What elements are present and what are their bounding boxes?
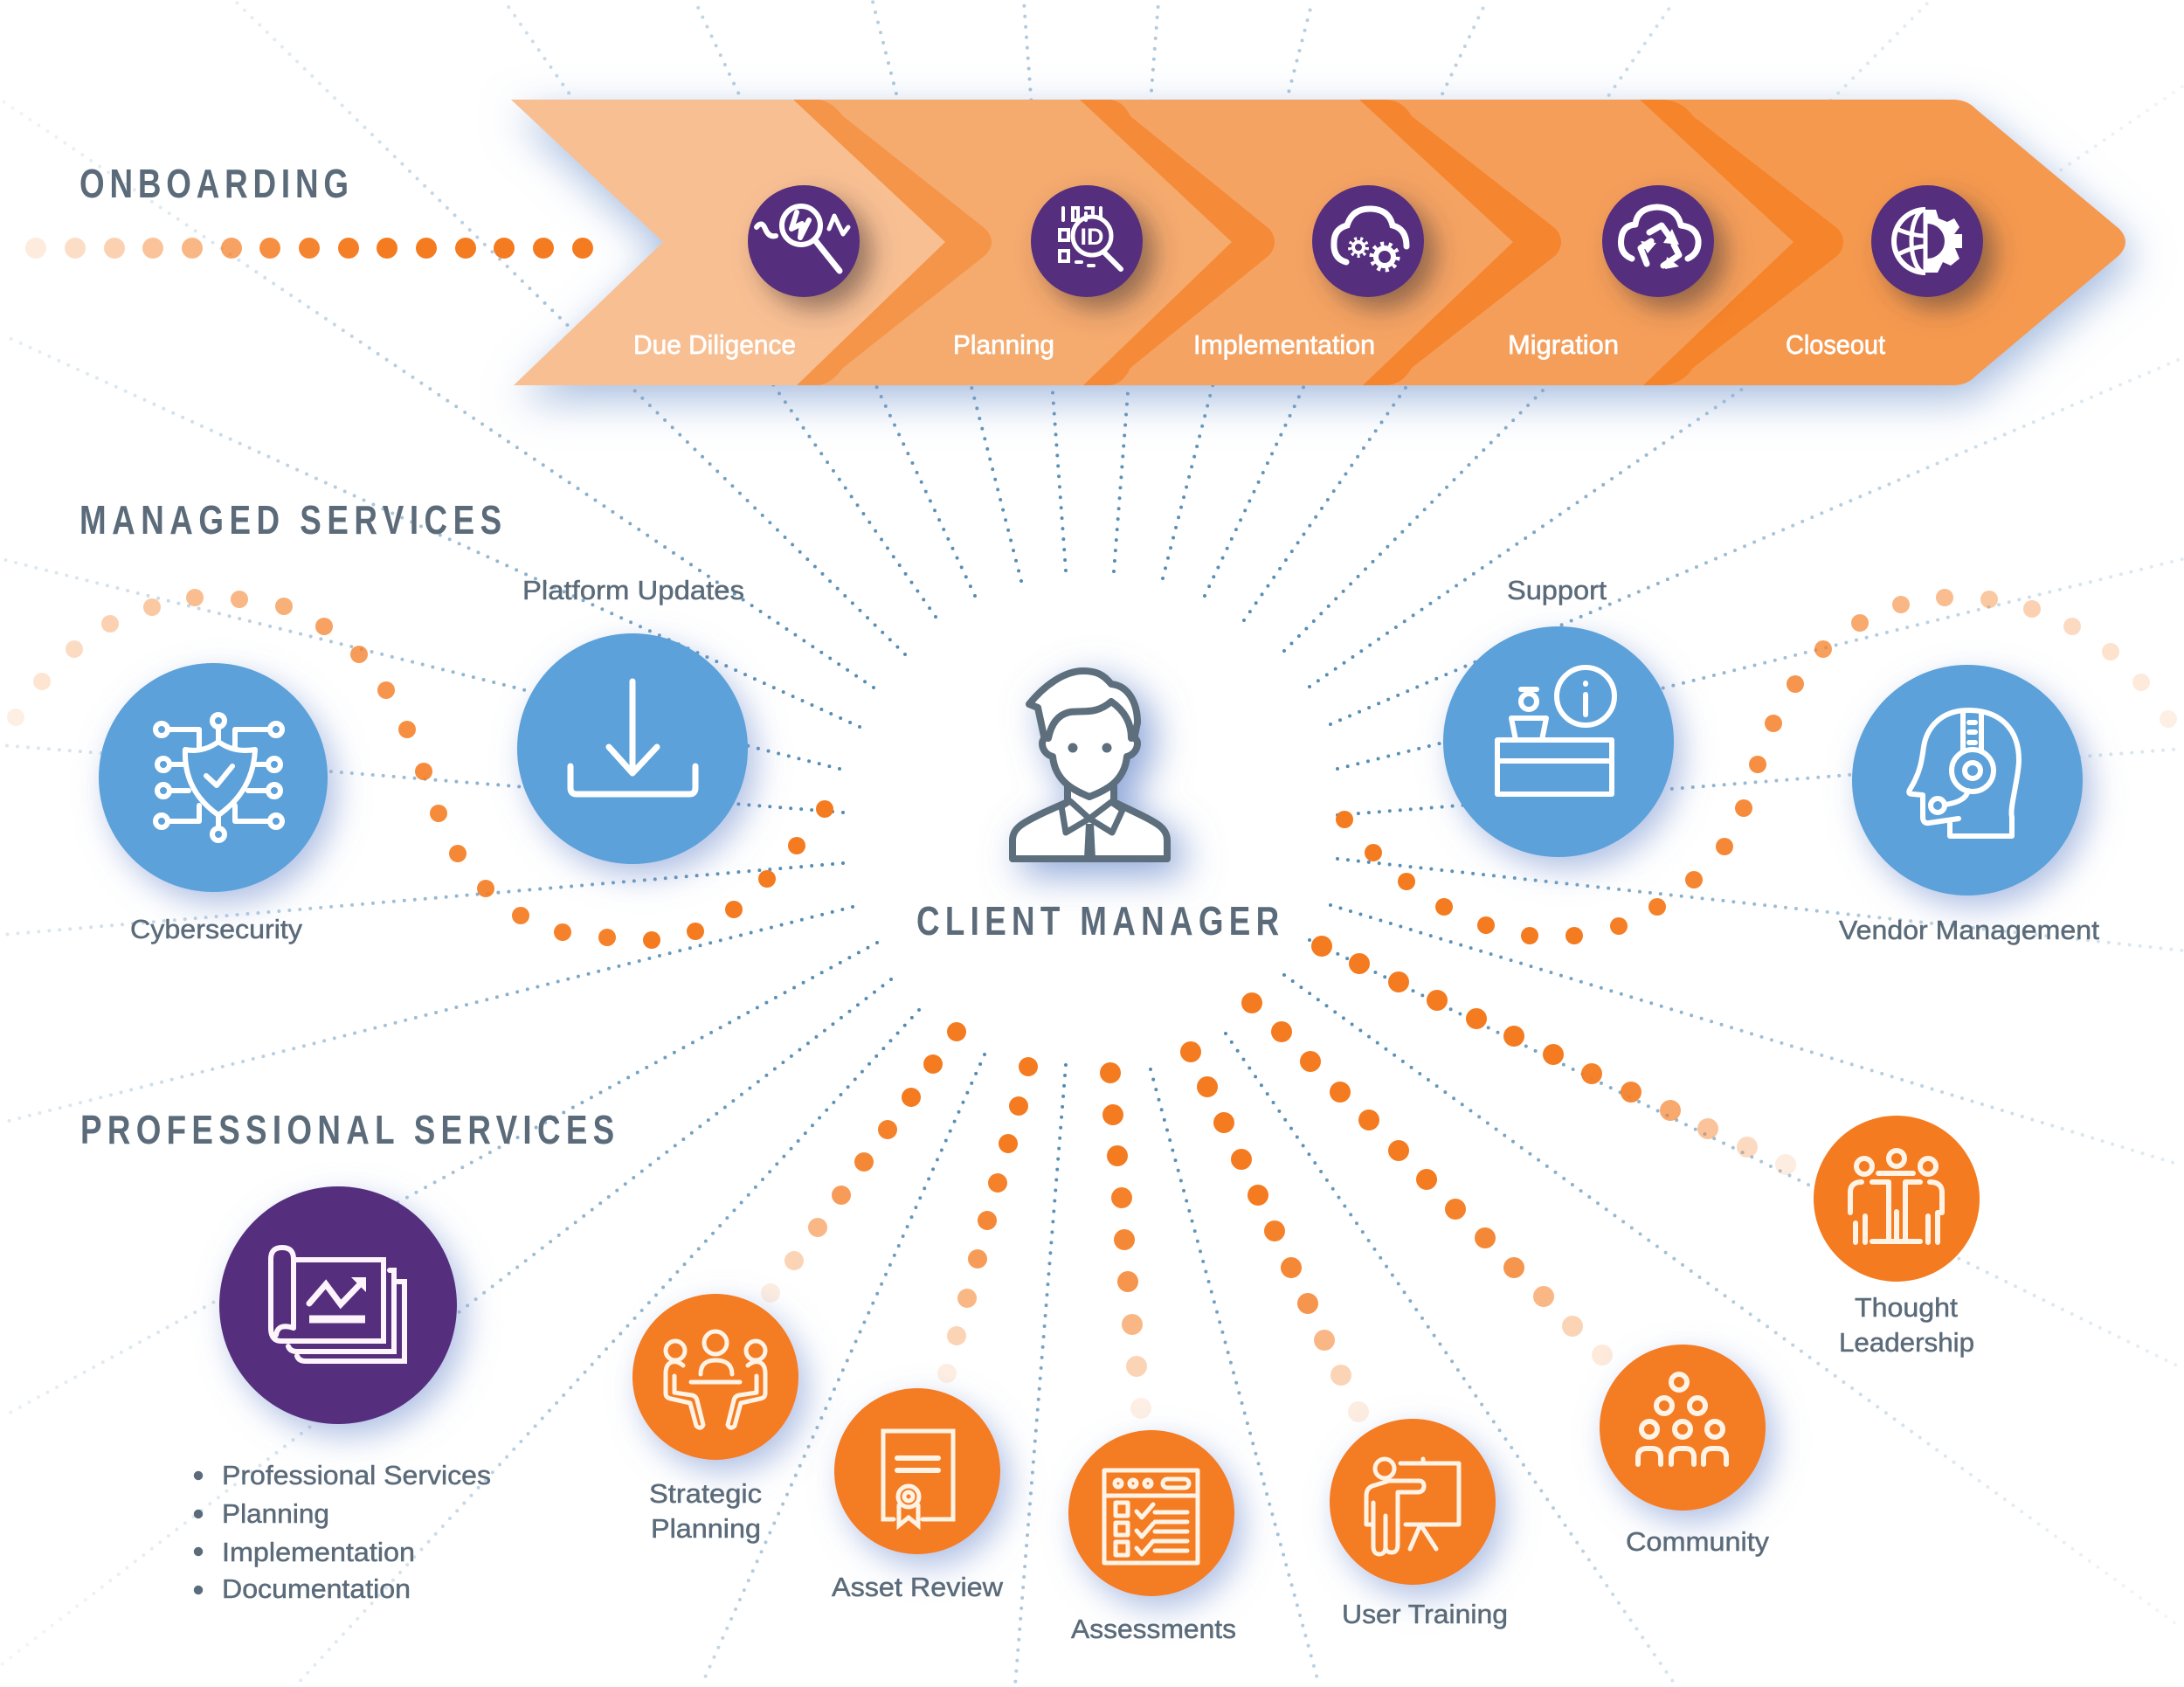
step labels: Due Diligence <box>633 329 796 360</box>
icon: blueprint chart <box>271 1248 404 1361</box>
panel: platform updates <box>517 575 748 864</box>
icon: certificate <box>883 1431 953 1525</box>
panel: community <box>1600 1345 1770 1557</box>
heading: managed services: MANAGED SERVICES <box>79 497 501 543</box>
panel: support <box>1443 575 1674 857</box>
icon: shield circuit <box>156 715 282 840</box>
label: Thought <box>1855 1292 1958 1323</box>
bullet list: Documentation <box>222 1573 411 1604</box>
icon: people at table <box>666 1331 765 1428</box>
panel: assessments <box>1068 1430 1236 1644</box>
label: Vendor Management <box>1839 915 2099 945</box>
label: Planning <box>651 1513 761 1544</box>
label: Leadership <box>1839 1327 1974 1358</box>
icon: checklist window <box>1104 1470 1198 1563</box>
bullet list <box>194 1460 491 1604</box>
step labels <box>633 329 1885 360</box>
left managed dot wave <box>7 589 833 949</box>
panel: strategic planning <box>632 1294 798 1544</box>
icon: presenter <box>1366 1459 1459 1554</box>
panel: vendor management <box>1839 665 2099 945</box>
step labels: Closeout <box>1786 329 1885 360</box>
panel: onboarding chevron process <box>511 100 2125 385</box>
panel: professional services list <box>194 1186 491 1604</box>
label: User Training <box>1342 1599 1508 1629</box>
panel: client manager <box>916 671 1279 944</box>
heading: onboarding: ONBOARDING <box>79 161 349 206</box>
panel: thought leadership <box>1814 1116 1980 1358</box>
label <box>649 1478 762 1544</box>
heading: client manager: CLIENT MANAGER <box>916 898 1279 944</box>
icon: three people <box>1850 1151 1942 1242</box>
label: Platform Updates <box>522 575 744 605</box>
bullet list: Professional Services <box>222 1460 491 1490</box>
step labels: Planning <box>953 329 1054 360</box>
arrow head <box>351 1277 366 1292</box>
panel: cybersecurity <box>99 663 328 944</box>
onboarding dot trail <box>25 238 593 259</box>
icon: person <box>1013 671 1167 859</box>
icon: planning id search <box>1031 185 1143 297</box>
icon: download <box>570 681 695 794</box>
orange dot fans toward professional services <box>761 936 1796 1422</box>
step labels: Migration <box>1508 329 1619 360</box>
icon: headset head <box>1909 710 2019 836</box>
icon: people pyramid <box>1638 1374 1726 1464</box>
icon: implementation cloud gears <box>1312 185 1424 297</box>
panel: user training <box>1330 1419 1508 1629</box>
label: Cybersecurity <box>130 914 303 944</box>
panel: asset review <box>832 1388 1004 1602</box>
heading: professional services: PROFESSIONAL SERVICES <box>80 1107 614 1152</box>
label <box>1839 1292 1974 1358</box>
label: Support <box>1507 575 1607 605</box>
label: Strategic <box>649 1478 762 1509</box>
bullet list: Implementation <box>222 1537 415 1567</box>
label: Community <box>1626 1526 1770 1557</box>
icon: info desk <box>1497 667 1614 794</box>
chevron arrow <box>511 100 2125 385</box>
right managed dot wave <box>1336 589 2177 944</box>
bullet list: Planning <box>222 1498 329 1529</box>
icon: planning id search: ID <box>1080 224 1104 250</box>
step labels: Implementation <box>1193 329 1375 360</box>
label: Asset Review <box>832 1572 1004 1602</box>
icon: migration cloud arrows <box>1602 185 1714 297</box>
label: Assessments <box>1071 1614 1236 1644</box>
icon: due diligence <box>748 185 860 297</box>
icon: closeout globe gear <box>1871 185 1983 297</box>
